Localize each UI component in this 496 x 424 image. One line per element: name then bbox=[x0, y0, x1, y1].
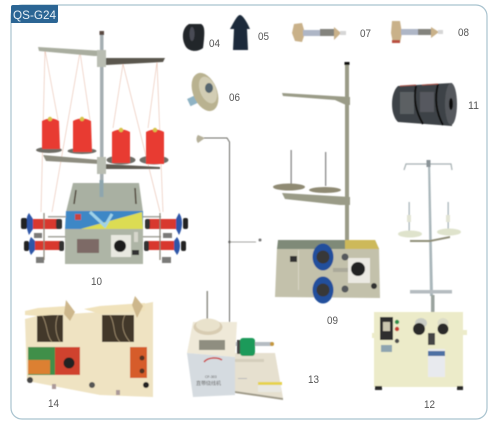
label 12: 12 bbox=[424, 399, 435, 411]
machine 10: four-cone winder bbox=[21, 31, 188, 264]
part 04: black cone bbox=[183, 24, 204, 51]
bobbin bbox=[225, 342, 272, 346]
label 05: 05 bbox=[258, 31, 269, 43]
label 13: 13 bbox=[308, 374, 319, 386]
part 11: black grooved drum bbox=[392, 83, 457, 126]
badge: model name QS-G24: QS-G24 bbox=[13, 8, 56, 22]
side spools left bbox=[21, 213, 66, 263]
label 14: 14 bbox=[48, 398, 59, 410]
label 08: 08 bbox=[458, 27, 469, 39]
label 04: 04 bbox=[209, 38, 220, 50]
label 06: 06 bbox=[229, 92, 240, 104]
machine 09: double-wheel winder bbox=[273, 62, 380, 304]
label 07: 07 bbox=[360, 28, 371, 40]
part 05: black guide bbox=[230, 15, 250, 50]
machine 13: single-spool winder: 直带绕线机 bbox=[196, 380, 221, 387]
label 09: 09 bbox=[327, 315, 338, 327]
label 10: 10 bbox=[91, 276, 102, 288]
part 08: tension screw bbox=[391, 21, 443, 43]
machine 14: cream double winder bbox=[25, 296, 153, 397]
part 07: tension screw bbox=[292, 23, 346, 42]
side spools right bbox=[143, 213, 188, 263]
winder box bbox=[187, 322, 237, 357]
machine top bbox=[66, 183, 143, 212]
machine 12: bench winder bbox=[372, 160, 467, 390]
machine 13: single-spool winder: CF-303 bbox=[205, 375, 217, 379]
machine front bbox=[65, 229, 143, 264]
part 06: metal disc bbox=[186, 69, 224, 115]
base plate bbox=[235, 353, 283, 398]
machine 13: single-spool winder bbox=[187, 135, 283, 400]
label 11: 11 bbox=[468, 100, 479, 112]
